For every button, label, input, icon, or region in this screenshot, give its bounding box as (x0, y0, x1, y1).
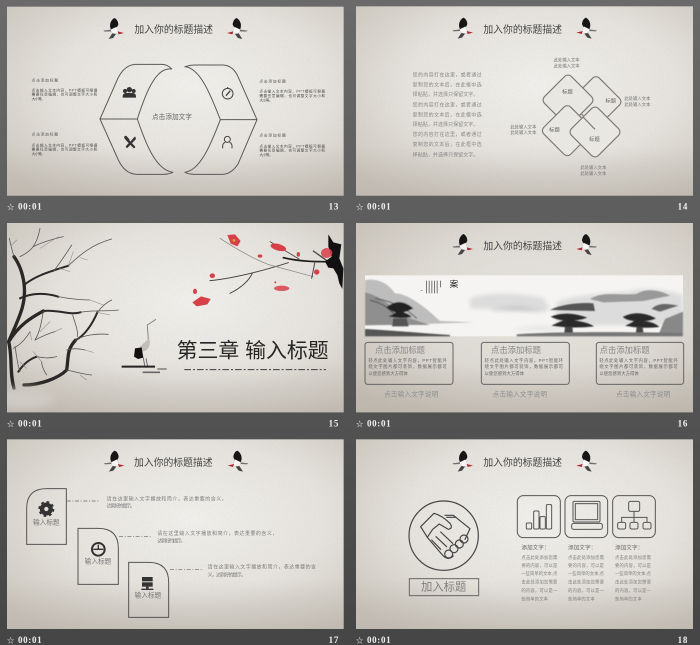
caption: left: 此处输入文本 (510, 129, 537, 136)
text block: upper left: 大小等。 (32, 96, 45, 101)
caption: bottom: 此处输入文本 (580, 164, 607, 171)
column 1 text: 点击此处添加您需 (521, 554, 558, 561)
column 1 text: 击此处添加您需要 (521, 578, 558, 585)
caption: right: 此处输入文本 (624, 101, 651, 108)
caption: left: 此处输入文本 (510, 123, 537, 130)
card: settings (27, 489, 66, 544)
card: clock (78, 528, 118, 584)
column 3 text: 些简单的文本 (615, 595, 642, 602)
column 1 text: 些简单的文本 (521, 595, 549, 602)
footer: time: ☆ (356, 635, 364, 644)
painting inscription (421, 281, 441, 293)
ink rock (325, 234, 343, 289)
column 2 text: 要的内容，可以是 (568, 562, 605, 569)
text 3: 义，达到好的提示。 (208, 571, 246, 578)
footer: slide number: 14 (678, 202, 688, 212)
text block: lower left (32, 131, 98, 156)
column 3 text: 一些简单的文本,点 (615, 570, 652, 577)
slide 18 title: 加入你的标题描述 (483, 456, 562, 469)
icon: laptop (565, 496, 608, 538)
footer: time: ☆ (7, 202, 15, 211)
connector 2 (119, 536, 152, 538)
column 2 text: 点击此处添加您需 (568, 554, 605, 561)
text 2: 请在这里输入文字播放和简介，表达重要的含义， (157, 530, 277, 537)
column 1 text: 一些简单的文本,点 (521, 570, 558, 577)
icon: compass (222, 87, 233, 99)
crane (122, 319, 167, 372)
card: settings: 输入标题 (33, 517, 60, 526)
text 3: 请在这里输入文字播放和简介，表达重要的含 (208, 563, 316, 570)
text block: upper left: 点击添加标题 (32, 78, 58, 83)
slide 14: interlocked diamonds (356, 6, 693, 212)
footer: time: 00:01 (367, 635, 391, 645)
right hexagon half (185, 65, 257, 174)
dash-dot rule (184, 368, 326, 371)
card 3: 点击添加标题 (600, 345, 650, 355)
icon: people (123, 87, 136, 98)
card: server: 输入标题 (135, 590, 162, 599)
paragraph text: 择粘贴，并选择只保留文字。 (413, 151, 478, 158)
connector 1 (67, 500, 100, 502)
footer: time: ☆ (356, 202, 364, 211)
footer: slide number: 17 (329, 635, 339, 645)
icon: right crane (228, 451, 248, 472)
diamond labels: 标题 (562, 88, 573, 96)
diamond labels: 标题 (549, 125, 560, 133)
slide 16: landscape panorama (356, 223, 693, 428)
card 2: 绕文字图片都可装饰，数据展示都可 (485, 363, 564, 370)
text block: lower right: 点击输入文本内容，PPT模板可根据 (259, 143, 325, 148)
column 3 text: 添加文字： (615, 544, 643, 552)
slide 13 title: 加入你的标题描述 (134, 23, 213, 36)
diamond labels (549, 88, 617, 143)
card 3: 以使您感到大方得体 (599, 370, 639, 377)
icon: bar chart (517, 496, 560, 538)
diamond labels: 标题 (605, 96, 617, 104)
icon: handshake in circle (409, 501, 478, 570)
footer: slide number: 15 (329, 418, 339, 428)
slide 17: three stepped cards (7, 439, 344, 645)
caption: top: 此处输入文本 (554, 62, 580, 69)
text 2 (157, 530, 277, 545)
column 3 text: 的内容，可以是一 (615, 587, 652, 594)
text block: lower left: 需要任意编辑，也可调整文字大小和 (32, 147, 98, 152)
column 1 text: 要的内容，可以是 (521, 562, 558, 569)
text block: lower right: 需要任意编辑，也可调整文字大小和 (259, 148, 325, 153)
paragraph text: 复制您的文本后，在此框中选 (413, 111, 482, 118)
card 1: 绕文字图片都可装饰，数据展示都可 (368, 363, 447, 370)
icon: tools (126, 137, 135, 147)
text block: upper left (32, 78, 98, 101)
text block: upper right: 需要任意编辑，也可调整文字大小和 (259, 93, 325, 98)
column 2 text: 的内容，可以是一 (568, 587, 605, 594)
footer: time: ☆ (7, 419, 15, 428)
captions: 点击输入文字说明 (493, 389, 547, 398)
card: clock: 输入标题 (85, 556, 112, 565)
text block: lower left: 点击输入文本内容，PPT模板可根据 (32, 142, 98, 147)
paragraph text (413, 72, 482, 158)
text block: upper left: 点击输入文本内容，PPT模板可根据 (32, 87, 98, 92)
text 3 (208, 563, 316, 578)
column 1 text: 添加文字： (521, 544, 550, 552)
footer: time: ☆ (7, 635, 15, 644)
card 1: 以使您感到大方得体 (368, 370, 408, 377)
slide 13: hexagon diagram (7, 7, 344, 212)
slide 18: handshake and icons (356, 439, 693, 645)
column 2 text (568, 544, 605, 602)
ink tree (9, 228, 118, 388)
card 2 (481, 342, 569, 384)
paragraph text: 您的内容打在这里，或者通过 (413, 101, 482, 108)
caption: bottom (580, 164, 607, 177)
paragraph text: 择粘贴，并选择只保留文字。 (413, 91, 478, 98)
text block: upper right: 大小等。 (259, 97, 273, 102)
card 2: 以使您感到大方得体 (485, 370, 525, 377)
footer: time: 00:01 (18, 418, 42, 428)
icon: left crane (104, 451, 124, 472)
column 1 text (521, 544, 558, 602)
footer: time: 00:01 (18, 202, 42, 212)
captions (384, 389, 671, 398)
text block: lower left: 点击添加标题 (32, 131, 58, 136)
caption: bottom: 此处输入文本 (580, 170, 607, 177)
text 2: 达到好的提示。 (157, 538, 186, 545)
text block: lower left: 大小等。 (32, 151, 45, 156)
icon: right crane (227, 18, 248, 39)
icon: left crane (103, 18, 124, 39)
caption: left (510, 123, 537, 136)
connector 3 (170, 569, 203, 571)
column 3 text: 要的内容，可以是 (615, 562, 652, 569)
text block: upper left: 需要任意编辑，也可调整文字大小和 (32, 92, 98, 97)
tree base fade (0, 388, 53, 408)
text block: upper right: 点击添加标题 (259, 78, 286, 83)
caption: right (624, 95, 651, 108)
text 1: 请在这里输入文字播放和简介，表达重要的含义， (107, 495, 227, 502)
column 1 text: 的内容，可以是一 (521, 587, 558, 594)
icon: left crane (452, 451, 473, 472)
column 2 text: 些简单的文本 (568, 595, 595, 602)
card 1: 轻点此处输入文字内容，PPT智能环 (368, 357, 447, 364)
text block: upper right: 点击输入文本内容，PPT模板可根据 (259, 89, 325, 94)
slide 17 title: 加入你的标题描述 (134, 456, 213, 469)
landscape painting: 案 (450, 278, 459, 289)
column 3 text: 点击此处添加您需 (615, 554, 652, 561)
footer: time: ☆ (356, 419, 364, 428)
diamond diagram (540, 73, 623, 159)
paragraph text: 您的内容打在这里，或者通过 (413, 131, 482, 138)
text 1 (107, 495, 227, 510)
footer: time: 00:01 (367, 202, 391, 212)
text block: lower right: 点击添加标题 (259, 133, 286, 138)
card 1 (365, 342, 453, 384)
paragraph text: 复制您的文本后，在此框中选 (413, 141, 482, 148)
paragraph text: 择粘贴，并选择只保留文字。 (413, 121, 478, 128)
column 2 text: 一些简单的文本,点 (568, 570, 605, 577)
footer: time: 00:01 (367, 418, 391, 428)
card 2: 轻点此处输入文字内容，PPT智能环 (485, 357, 564, 364)
slide 16 title: 加入你的标题描述 (483, 239, 562, 252)
title box: 加入标题 (421, 580, 466, 593)
diamond labels: 标题 (589, 135, 600, 143)
icon: user (223, 136, 232, 148)
caption: top (554, 56, 580, 69)
title box (409, 579, 479, 596)
slide 14 title: 加入你的标题描述 (483, 23, 562, 36)
caption: right: 此处输入文本 (624, 95, 651, 102)
chapter title: 第三章 输入标题 (177, 339, 329, 362)
card: server (129, 562, 169, 617)
footer: slide number: 13 (329, 202, 339, 212)
slide 15: chapter cover (0, 223, 344, 428)
icon: right crane (576, 234, 597, 255)
card 3: 轻点此处输入文字内容，PPT智能环 (599, 357, 678, 364)
plum branch (210, 238, 328, 293)
left hexagon half (100, 64, 173, 174)
card 3 (596, 342, 684, 384)
paragraph text: 复制您的文本后，在此框中选 (413, 82, 482, 89)
text 1: 达到好的提示。 (107, 503, 135, 510)
column 3 text (615, 544, 652, 602)
captions: 点击输入文字说明 (616, 389, 671, 398)
icon: left crane (452, 18, 473, 39)
card 2: 点击添加标题 (491, 345, 542, 355)
column 2 text: 击此处添加您需要 (568, 578, 605, 585)
text block: lower right: 大小等。 (259, 152, 273, 157)
footer: slide number: 18 (678, 635, 688, 645)
column 2 text: 添加文字： (568, 544, 596, 552)
center label: 点击添加文字 (152, 112, 192, 121)
column 3 text: 击此处添加您需要 (615, 578, 652, 585)
icon: right crane (576, 451, 597, 472)
footer: slide number: 16 (678, 418, 688, 428)
footer: time: 00:01 (18, 635, 42, 645)
paragraph text: 您的内容打在这里，或者通过 (413, 72, 482, 79)
caption: top: 此处输入文本 (554, 56, 580, 63)
icon: right crane (576, 18, 597, 39)
captions: 点击输入文字说明 (384, 389, 439, 398)
landscape painting (365, 275, 683, 336)
icon: org chart (613, 496, 655, 538)
text block: lower right (259, 133, 325, 157)
card 3: 绕文字图片都可装饰，数据展示都可 (599, 363, 678, 370)
icon: left crane (452, 234, 473, 255)
plum blossoms (192, 234, 332, 306)
text block: upper right (259, 78, 325, 102)
card 1: 点击添加标题 (375, 345, 426, 355)
